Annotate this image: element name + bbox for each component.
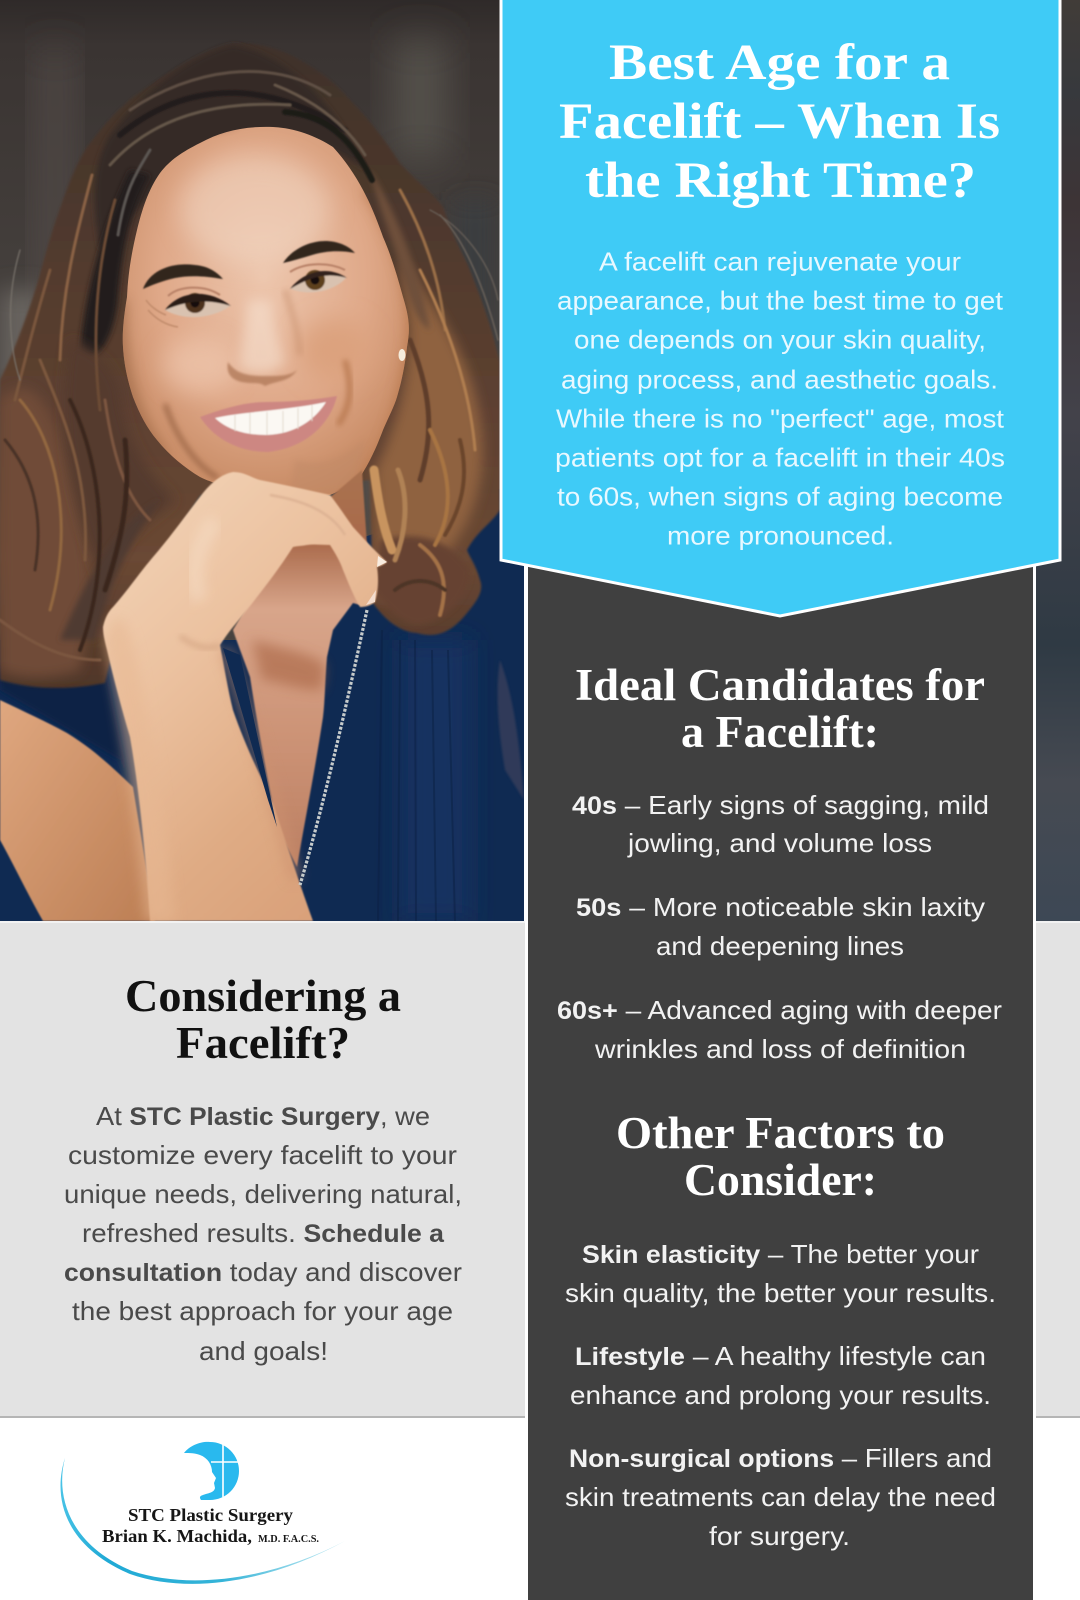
title: Facelift – When Is	[559, 94, 1000, 150]
text block: ideal candidates by age	[557, 790, 1002, 1064]
item: non-surgical options: skin treatments can delay the need	[565, 1482, 996, 1512]
panel: blue banner	[501, 0, 1060, 616]
text block: call to action: consultation today and discover	[64, 1257, 462, 1287]
item: 50s: and deepening lines	[656, 931, 904, 961]
title: the Right Time?	[585, 153, 976, 209]
logo text: STC Plastic Surgery	[128, 1505, 293, 1525]
item: 40s: jowling, and volume loss	[627, 828, 932, 858]
text block: call to action	[64, 1101, 462, 1366]
item: 40s: 40s – Early signs of sagging, mild	[572, 790, 989, 820]
heading: considering a facelift	[125, 971, 401, 1068]
heading: other factors: Consider:	[684, 1155, 877, 1205]
text block: intro: patients opt for a facelift in their 40s	[555, 442, 1005, 472]
text block: intro: to 60s, when signs of aging become	[557, 482, 1003, 512]
text block: call to action: At STC Plastic Surgery , we	[96, 1101, 430, 1131]
face	[122, 126, 409, 496]
item: 60s+: 60s+ – Advanced aging with deeper	[557, 995, 1002, 1025]
logo text: M.D. F.A.C.S.	[258, 1534, 320, 1545]
text block: intro: A facelift can rejuvenate your	[599, 246, 961, 276]
logo text	[102, 1505, 320, 1546]
heading: ideal candidates: Ideal Candidates for	[575, 660, 985, 710]
text block: intro	[555, 246, 1005, 550]
logo: STC Plastic Surgery	[61, 1442, 345, 1584]
text block: call to action: the best approach for your age	[72, 1296, 453, 1326]
grey panel: considering a facelift	[0, 921, 1080, 1418]
heading: considering a facelift: Considering a	[125, 971, 401, 1021]
heading: ideal candidates	[575, 660, 985, 757]
photo: smiling woman resting chin on hand	[0, 0, 524, 921]
icon: head profile in blue circle	[184, 1442, 239, 1500]
heading: ideal candidates: a Facelift:	[681, 707, 879, 757]
heading: other factors	[616, 1108, 945, 1205]
dress sliver beside the chest	[223, 648, 277, 827]
heading: other factors: Other Factors to	[616, 1108, 945, 1158]
photo: backdrop strip on the right edge	[1036, 0, 1080, 921]
item: lifestyle	[570, 1341, 991, 1410]
text block: intro: one depends on your skin quality,	[574, 324, 986, 354]
earring	[398, 349, 406, 361]
title: Best Age for a	[609, 35, 950, 91]
item: 60s+: wrinkles and loss of definition	[594, 1034, 966, 1064]
text block: intro: more pronounced.	[667, 520, 894, 550]
heading: considering a facelift: Facelift?	[176, 1018, 350, 1068]
hand and forearm	[103, 472, 387, 921]
eyes	[146, 264, 347, 327]
text block: call to action: refreshed results. Schedule a	[82, 1218, 445, 1248]
text block: other factors	[565, 1239, 996, 1551]
item: non-surgical options	[565, 1443, 996, 1551]
nose	[227, 290, 300, 386]
text block: intro: While there is no "perfect" age, most	[556, 404, 1005, 434]
blurred backdrop	[0, 0, 500, 640]
item: 60s+	[557, 995, 1002, 1064]
neck and chest	[233, 470, 368, 867]
dress	[0, 480, 524, 921]
item: non-surgical options: for surgery.	[709, 1521, 850, 1551]
item: skin elasticity: Skin elasticity – The better your	[582, 1239, 979, 1269]
item: 50s: 50s – More noticeable skin laxity	[576, 892, 985, 922]
text block: intro: appearance, but the best time to get	[557, 286, 1004, 316]
upper arm	[0, 700, 155, 921]
text block: call to action: and goals!	[199, 1336, 328, 1366]
text block: call to action: customize every facelift to your	[68, 1140, 457, 1170]
item: lifestyle: Lifestyle – A healthy lifestyle can	[575, 1341, 986, 1371]
title	[559, 35, 1000, 209]
icon: swoosh arc	[61, 1458, 345, 1584]
necklace	[300, 610, 367, 885]
item: skin elasticity	[565, 1239, 996, 1308]
mouth	[200, 396, 337, 452]
hair strands	[0, 71, 498, 660]
panel: dark column	[526, 500, 1034, 1600]
item: non-surgical options: Non-surgical options – Fillers and	[569, 1443, 992, 1473]
item: lifestyle: enhance and prolong your results.	[570, 1380, 991, 1410]
text block: call to action: unique needs, delivering natural,	[64, 1179, 462, 1209]
item: 40s	[572, 790, 989, 858]
hair strand: bright lock beside the neck	[374, 470, 405, 560]
eyebrows	[143, 241, 355, 289]
text block: intro: aging process, and aesthetic goals.	[561, 364, 998, 394]
logo text: Brian K. Machida,	[102, 1526, 252, 1546]
hair mass	[0, 43, 500, 688]
item: skin elasticity: skin quality, the better your results.	[565, 1278, 996, 1308]
item: 50s	[576, 892, 985, 961]
